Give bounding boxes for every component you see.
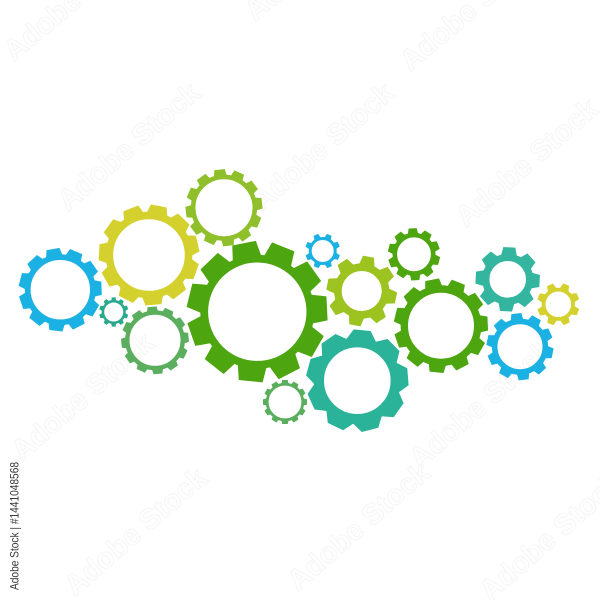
watermarks: Adobe Stock (52, 76, 207, 217)
gear: left blue (14, 242, 108, 336)
gear: yellow (96, 201, 204, 310)
stock id caption: Adobe Stock | #1441048568 (8, 462, 22, 590)
gear: top lime (181, 165, 267, 251)
watermarks: Adobe Stock (59, 461, 214, 600)
gear: tiny teal (99, 297, 128, 327)
watermarks: Adobe Stock (6, 326, 161, 467)
gear: small yellow (535, 281, 582, 328)
watermarks: Adobe Stock (282, 456, 437, 597)
gear: medium dark green (389, 273, 494, 378)
gear: centre lime (326, 255, 398, 327)
gear: large dark green (178, 231, 338, 390)
gear: small green bottom (263, 380, 307, 424)
gear: right blue (485, 313, 555, 380)
watermarks: Adobe Stock (246, 76, 401, 217)
gear: medium green (117, 302, 193, 378)
watermarks: Adobe Stock (450, 92, 600, 233)
gear: right teal (475, 247, 540, 312)
gear: small dark green (387, 228, 441, 281)
watermarks: Adobe Stock (404, 334, 559, 475)
gear: small blue (304, 232, 342, 270)
gear: large teal (303, 328, 412, 436)
